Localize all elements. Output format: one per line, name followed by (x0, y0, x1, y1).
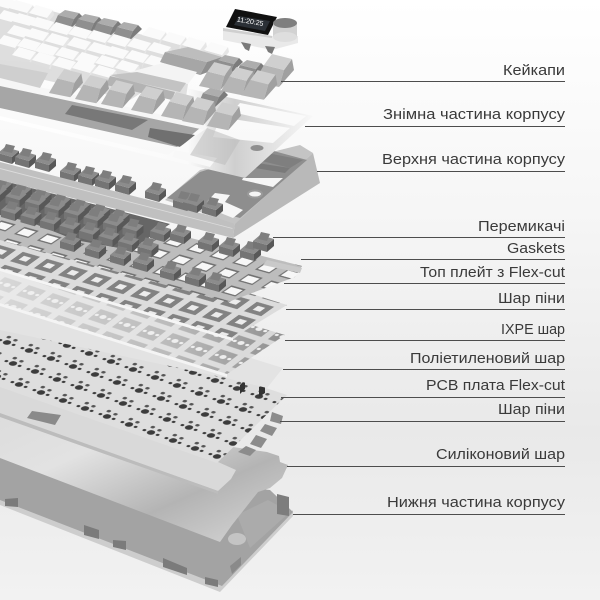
label: top plate: Топ плейт з Flex-cut (420, 265, 565, 281)
keycaps (0, 0, 294, 130)
screen module: 11:20:25 (236, 16, 264, 28)
label: switches: Перемикачі (478, 219, 565, 235)
label: bottom case: Нижня частина корпусу (387, 495, 566, 511)
layer: lower foam (0, 365, 236, 494)
layer: PCB (0, 300, 287, 463)
label: polyethylene: Поліетиленовий шар (410, 351, 565, 367)
layer: top plate (0, 190, 302, 302)
layer: polyethylene (0, 280, 283, 388)
layer: connector tabs (238, 412, 283, 456)
layer: silicone (0, 413, 288, 542)
label: keycaps: Кейкапи (503, 63, 565, 79)
label: foam: Шар піни (498, 291, 565, 307)
layer: removable case part (0, 78, 313, 178)
label: lower foam: Шар піни (498, 402, 565, 418)
label: IXPE: IXPE шар (501, 322, 565, 338)
label: removable case part: Знімна частина корпусу (383, 107, 566, 123)
labels (273, 63, 566, 514)
label: PCB: PCB плата Flex-cut (426, 378, 565, 394)
switches (0, 144, 274, 292)
layer: upper case (0, 145, 320, 238)
label: gaskets: Gaskets (507, 241, 565, 257)
exploded keyboard (0, 0, 320, 592)
layer: foam (0, 215, 287, 341)
label: silicone: Силіконовий шар (436, 447, 565, 463)
screen module (223, 9, 298, 54)
gasket strip (263, 260, 302, 273)
label: upper case: Верхня частина корпусу (382, 152, 566, 168)
layer: IXPE (0, 250, 285, 377)
switch bed shadow (0, 180, 170, 250)
layer: bottom case (0, 458, 293, 592)
